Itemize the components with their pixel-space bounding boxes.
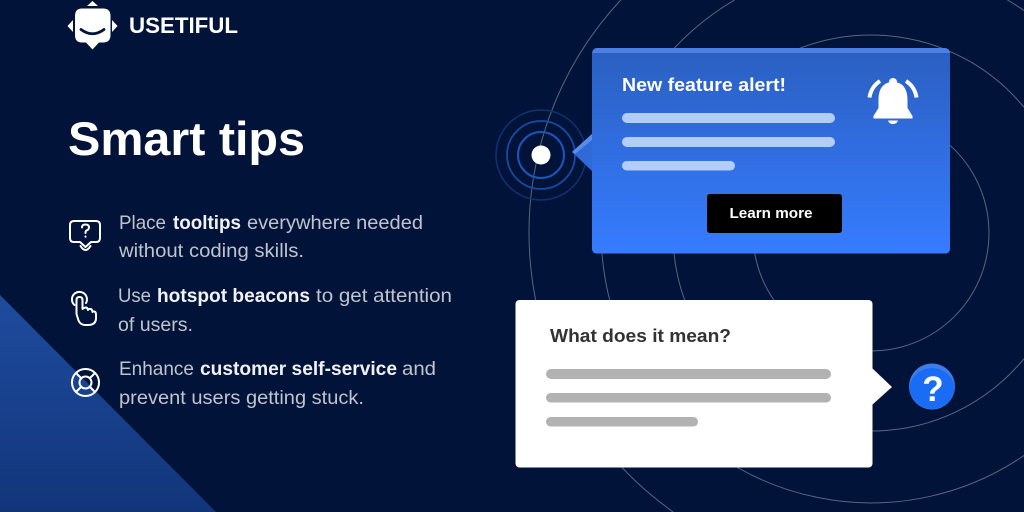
hotspot text: Use — [118, 285, 151, 307]
icon: lifebuoy — [72, 369, 99, 396]
hotspot text: hotspot beacons — [157, 285, 310, 307]
tooltip text — [118, 212, 423, 262]
question mark button: ? — [922, 370, 944, 409]
logo icon — [68, 1, 118, 50]
card heading: New feature alert! — [622, 74, 786, 95]
placeholder lines — [622, 113, 835, 170]
logo wordmark: USETIFUL — [129, 13, 238, 38]
card tail — [872, 368, 892, 405]
title: Smart tips — [68, 112, 305, 165]
self-service text: prevent users getting stuck. — [119, 387, 364, 409]
hotspot beacon — [496, 110, 586, 200]
icon: pointing hand — [72, 292, 96, 325]
hotspot text: to get attention — [316, 285, 452, 307]
icon: question speech bubble — [70, 221, 100, 250]
tooltip text: everywhere needed — [247, 212, 423, 234]
learn more button: Learn more — [730, 206, 812, 222]
logo — [68, 1, 238, 50]
tooltip text: tooltips — [173, 212, 241, 234]
card tail — [572, 133, 593, 172]
self-service text: customer self-service — [200, 358, 397, 380]
self-service text: Enhance — [119, 358, 194, 380]
card body — [516, 300, 872, 468]
white question card — [516, 300, 892, 468]
self-service text — [119, 358, 436, 409]
self-service text: and — [402, 358, 436, 380]
hotspot text — [118, 285, 452, 336]
background triangle — [0, 295, 216, 512]
icon: bell — [870, 78, 916, 124]
question mark button — [909, 364, 955, 410]
tooltip text: Place — [119, 212, 166, 234]
blue feature alert card — [572, 48, 950, 254]
concentric background arcs — [529, 0, 1024, 512]
learn more button — [707, 194, 842, 233]
tooltip text: without coding skills. — [118, 240, 304, 262]
card body — [592, 48, 950, 254]
hotspot text: of users. — [118, 314, 193, 336]
placeholder lines — [546, 369, 831, 426]
card heading: What does it mean? — [550, 325, 731, 346]
